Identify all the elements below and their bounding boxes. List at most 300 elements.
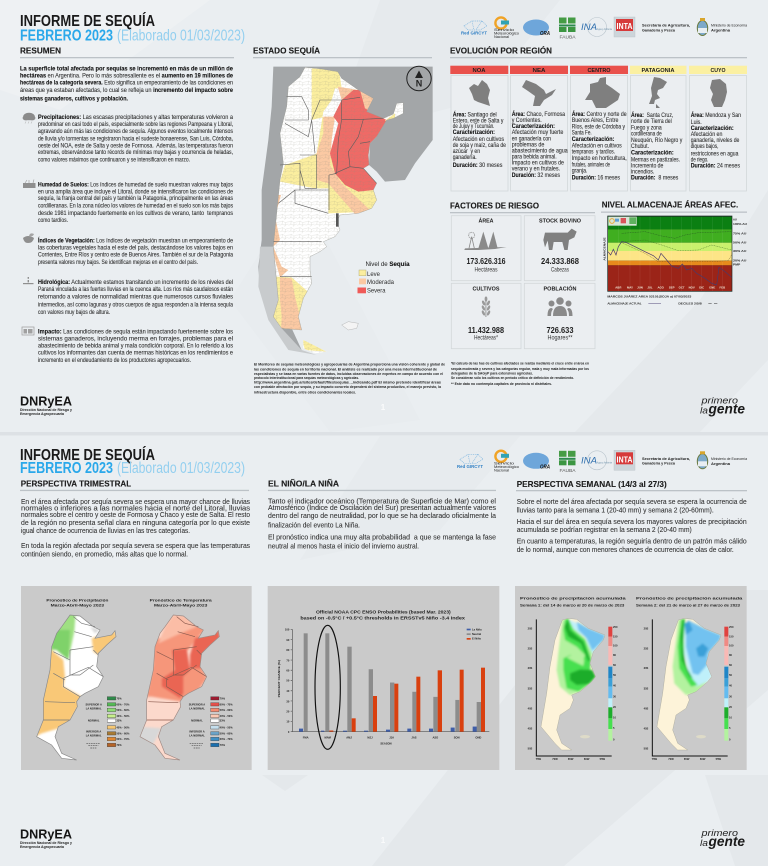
map titles: Pronóstico de Precipitación <box>46 598 108 602</box>
page 2 logos: Meteorológico <box>494 465 519 469</box>
text: CUYO: Afectación en <box>691 131 722 138</box>
text: CUYO: Duración: 24 meses <box>691 163 740 170</box>
text block: resumen intro: áreas que ya estaban afectadas, lo cual se refleja un incremento del impacto sobre <box>20 87 233 94</box>
heading: resumen: RESUMEN <box>20 47 61 56</box>
panel: area: 173.626.316 <box>466 256 506 266</box>
page number 2: 1 <box>381 836 386 845</box>
map axes and colour bars: 70W <box>668 757 674 761</box>
logo: primero la gente page 2: la <box>700 838 708 849</box>
axes: 90 <box>286 638 290 642</box>
text: CUYO <box>691 112 741 170</box>
legend: precipitation <box>85 696 130 748</box>
map axes and colour bars: 50 <box>729 673 732 677</box>
chart title: Official NOAA CPC ENSO Probabilities (based Mar. 2023) <box>316 609 451 614</box>
map axes and colour bars: 20S <box>644 627 649 631</box>
icon: PATAGONIA map <box>649 77 667 108</box>
text: NEA: en ganadería con <box>512 136 551 142</box>
text block: resumen intro: La superficie total afectada por sequías se incrementó en más de un millón de <box>20 65 233 72</box>
text: NOA: Estero, este de Salta y <box>453 118 504 124</box>
page number 1: 1 <box>381 403 386 412</box>
text: PATAGONIA: Fuego y zona <box>631 124 662 131</box>
legend: precipitation: 50% - 60% <box>116 708 130 712</box>
text: NEA: Impacto en cultivos de <box>512 160 565 166</box>
axes <box>277 628 489 746</box>
text block: resumen intro: sistemas ganaderos, cultivos y población. <box>20 96 128 102</box>
footnote: monitoreo <box>254 362 446 395</box>
axes: 0 <box>288 730 290 734</box>
panel: area: Hectáreas <box>474 266 498 274</box>
map axes and colour bars: 150 <box>613 634 618 638</box>
text: CENTRO: Impacto en horticultura, <box>572 155 627 162</box>
text: CENTRO: tempranos y tardíos. <box>572 149 615 156</box>
heading: perspectiva trimestral: PERSPECTIVA TRIMESTRAL <box>21 479 131 488</box>
chart: nivel de almacenaje: AU <box>733 218 737 222</box>
chart: nivel de almacenaje: DIC <box>699 286 704 290</box>
chart: nivel de almacenaje: ALMACENAJE <box>603 237 607 261</box>
page 1 logos: Red GIRCYT <box>461 30 487 36</box>
icon: CUYO map <box>710 79 727 107</box>
page 1 logos <box>461 17 747 40</box>
map axes and colour bars: 25S <box>528 647 533 651</box>
map axes and colour bars <box>528 619 734 761</box>
text block: hidrologica: con valores muy bajos de altura. <box>38 309 110 316</box>
logo: primero la gente page 2: primero <box>700 828 738 839</box>
axes: AMJ <box>346 735 352 739</box>
chart: nivel de almacenaje: MARCOS JUÁREZ AREA 52101(SOJA a) 07/03/2023 <box>607 294 692 299</box>
page 2 title: FEBRERO 2023 <box>20 460 113 477</box>
legend: temperature: SUPERIOR A <box>189 702 205 706</box>
chart: nivel de almacenaje: 20% AU <box>733 259 746 263</box>
map axes and colour bars: 80 <box>613 653 616 657</box>
legend: temperature: NORMAL <box>191 718 203 722</box>
footnote: monitoreo: El Monitoreo de sequías meteorológicas y agropecuarias de Argentina proporciona una visión coherente y global de <box>254 362 446 366</box>
text: PATAGONIA: Área: Santa Cruz, <box>631 112 674 119</box>
chart: nivel de almacenaje: 100% AU <box>733 222 747 226</box>
axes: JJA <box>389 735 394 739</box>
chart: nivel de almacenaje: OCT <box>679 286 685 290</box>
panel: CUYO <box>689 66 747 191</box>
text block: indices de vegetacion: Corrientes, Entre Ríos y centro este de Buenos Aires. También el sur de la Patagonia <box>38 252 233 259</box>
icon: cow <box>543 229 577 250</box>
text block: perspectiva semanal: Sobre el norte del área afectada por sequía severa se espera la ocurrencia de <box>517 497 747 506</box>
logo: DNRyEA page 2: Emergencia Agropecuaria <box>20 845 65 849</box>
text block: humedad de suelos: Humedad de Suelos: Los índices de humedad de suelo muestran valores muy bajos <box>38 182 233 188</box>
panel: pronostico semanal maps <box>515 586 747 770</box>
map axes and colour bars: 30 <box>729 694 732 698</box>
map axes and colour bars: 100 <box>729 644 734 648</box>
axes: 70 <box>286 658 290 662</box>
text: PATAGONIA <box>631 112 683 182</box>
page 1 logos: INA <box>581 22 597 32</box>
icon: windmill and trees <box>464 232 507 250</box>
legend: precipitation: 70% <box>116 743 122 747</box>
text block: el nino la nina <box>268 496 497 551</box>
page 1 logos: ORA <box>540 31 550 37</box>
text: CUYO: restricciones en agua <box>691 150 739 157</box>
map titles: Pronóstico de Temperatura <box>150 598 212 602</box>
chart: nivel de almacenaje: ABR <box>615 286 621 290</box>
text: NEA: Área: Chaco, Formosa <box>512 111 566 118</box>
heading: perspectiva semanal: PERSPECTIVA SEMANAL (14/3 al 27/3) <box>517 480 667 489</box>
text: CENTRO: Buenos Aires, Entre <box>572 117 619 124</box>
panel: poblacion: 726.633 <box>546 325 574 335</box>
heading: evolucion por region: EVOLUCIÓN POR REGIÓN <box>450 45 552 56</box>
legend: temperature: 50% - 60% <box>220 708 233 712</box>
panel: cultivos: 11.432.988 <box>468 325 504 335</box>
map axes and colour bars: 10 <box>613 716 616 720</box>
page 2 logos: Secretaría de Agricultura, <box>642 456 690 461</box>
legend: temperature: 70% <box>220 696 226 700</box>
text block: precipitaciones: oeste del NOA, este de Salta y oeste de Formosa. Además, las temperaturas fueron <box>38 142 233 150</box>
footnote: monitoreo: infraestructura disponible, entre otros condicionantes locales. <box>254 390 356 395</box>
text: PATAGONIA: Mermas en pastizales. <box>631 157 680 164</box>
axes: SEASON <box>380 742 392 746</box>
panel: area: ÁREA <box>478 218 494 225</box>
legend: precipitation: 60% - 70% <box>116 737 130 741</box>
text: CENTRO: Duración: 16 meses <box>572 175 620 182</box>
chart: nivel de almacenaje: 50% AU <box>733 240 746 244</box>
chart: nivel de almacenaje: JUL <box>647 286 653 290</box>
legend: nivel de sequia: Severa <box>367 288 386 295</box>
chart: nivel de almacenaje: 75% AU <box>733 231 746 235</box>
panel: poblacion: Hogares** <box>548 334 573 342</box>
map: temperature outlook <box>140 614 220 760</box>
legend: temperature: 40% - 50% <box>220 725 233 729</box>
map axes and colour bars: 55W <box>600 757 606 761</box>
logo: primero la gente page 1 <box>700 396 745 416</box>
page 1 title <box>20 11 245 44</box>
footnote: factores: delegados de la SAGyP para extensivos agrícolas. <box>451 370 533 376</box>
panel: cultivos: Hectáreas* <box>474 334 498 342</box>
page 2 logos: INTA <box>616 455 633 464</box>
legend: precipitation: SUPERIOR A <box>85 702 102 706</box>
map axes and colour bars: 30 <box>613 694 616 698</box>
chart title: based on -0.5°C / +0.5°C thresholds in ERSSTv5 Niño -3.4 Index <box>300 615 466 620</box>
axes: MAM <box>324 735 332 739</box>
legend: temperature: 60% - 70% <box>220 702 233 706</box>
text: CUYO: Área: Mendoza y San <box>691 112 741 119</box>
footnote: factores <box>451 360 590 386</box>
page 1 logos: Servicio <box>494 28 514 32</box>
map: week 1 <box>540 618 606 750</box>
axes: 60 <box>286 669 290 673</box>
axes: JAS <box>411 735 417 739</box>
logo: DNRyEA page 1: Dirección Nacional de Riesgo y <box>20 408 72 412</box>
map axes and colour bars: 30S <box>644 666 649 670</box>
page 2 logos: Ganadería y Pesca <box>642 461 676 466</box>
chart legend <box>467 628 482 641</box>
text: NEA: y Corrientes. <box>512 117 542 124</box>
map axes and colour bars: 30S <box>528 666 533 670</box>
legend: precipitation: LA NORMAL <box>86 707 102 711</box>
map titles: Marzo-Abril-Mayo 2023 <box>51 604 104 608</box>
legend: precipitation: 50% - 60% <box>116 731 130 735</box>
text: NEA: verano y en frutales. <box>512 166 560 172</box>
axes: ASO <box>432 735 438 739</box>
map axes and colour bars: 55W <box>716 757 722 761</box>
text block: hidrologica: Paraná vinculada a las fuertes lluvias en la cuenca alta. Los ríos más caudalosos están <box>38 286 233 293</box>
text: NEA: Afectación muy fuerte <box>512 129 564 136</box>
text: CUYO: de riego. <box>691 156 709 163</box>
map axes and colour bars: 20 <box>729 705 732 709</box>
text block: impacto: cultivos los informantes dan cuenta de mermas históricas en los rendimientos e <box>38 350 233 357</box>
chart title <box>300 609 466 620</box>
legend: precipitation: INFERIOR A <box>86 730 101 734</box>
axes: 50 <box>286 679 290 683</box>
page 1 title: (Elaborado 01/03/2023) <box>117 27 245 44</box>
icon: vegetation <box>23 233 34 243</box>
legend: precipitation: LA NORMAL <box>86 734 102 738</box>
icon: NOA map <box>469 80 490 106</box>
panel: PATAGONIA: PATAGONIA <box>642 68 675 74</box>
axes: 20 <box>286 710 290 714</box>
panel: NEA <box>510 66 568 191</box>
text block: perspectiva trimestral: En el área afectada por sequía severa se espera una mayor chance de lluvias <box>21 497 250 506</box>
panel: stock bovino: 24.333.868 <box>541 256 579 266</box>
axes: 80 <box>286 648 290 652</box>
chart: nivel de almacenaje: FEB <box>719 286 725 290</box>
panel: cultivos <box>451 283 521 349</box>
text: CENTRO: granja. <box>572 167 588 174</box>
text: PATAGONIA: incendios. <box>631 169 655 176</box>
text: PATAGONIA: norte de Tierra del <box>631 118 672 125</box>
legend: precipitation: 33% <box>116 719 122 723</box>
text: NOA: azúcar y en <box>453 148 480 155</box>
text: CENTRO <box>572 111 627 182</box>
footnote: monitoreo: con probable afectación por sequía, y su impacto concreto dependerá del sistema productivo, el manejo previsto, la <box>254 384 442 389</box>
map titles: Pronóstico de precipitación acumulada <box>520 597 626 601</box>
text: NEA: para bebida animal. <box>512 154 557 160</box>
chart: nivel de almacenaje: PMP <box>733 262 741 266</box>
heading: estado sequia: ESTADO SEQUÍA <box>253 46 320 56</box>
legend: nivel de sequia <box>358 261 410 295</box>
compass <box>407 66 431 91</box>
panel: stock bovino <box>524 216 595 281</box>
map axes and colour bars: 35S <box>528 687 533 691</box>
map axes and colour bars: 5 <box>729 726 731 730</box>
icon: impact <box>22 327 34 335</box>
map axes and colour bars: 40 <box>729 684 732 688</box>
map axes and colour bars: 250 <box>613 625 618 629</box>
text block: resumen intro: hectáreas de la categoría severa. Esto significa un empeoramiento de las condiciones en <box>20 80 233 87</box>
page 2 logos: ORA <box>540 464 550 470</box>
icon: cloud <box>23 113 35 124</box>
panel: cultivos: CULTIVOS <box>472 287 500 293</box>
text: NOA: de Jujuy y Tucumán. <box>453 123 495 130</box>
map axes and colour bars: 150 <box>729 634 734 638</box>
icon: people <box>548 297 572 316</box>
icon: water level <box>23 277 34 284</box>
heading: factores de riesgo: FACTORES DE RIESGO <box>450 202 540 211</box>
logo: DNRyEA page 1 <box>20 394 73 416</box>
panel: CENTRO: CENTRO <box>588 68 611 74</box>
page 1 logos: Ganadería y Pesca <box>642 27 676 32</box>
legend: temperature: 70% <box>220 743 226 747</box>
legend: precipitation: 40% - 50% <box>116 714 130 718</box>
page 2 title: (Elaborado 01/03/2023) <box>117 460 245 477</box>
text block: hidrologica: intermedios, así como lagunas y otros cuerpos de agua responden a la intensa sequía <box>38 301 233 308</box>
map titles: Semana 1: del 14 de marzo al 20 de marzo de 2023 <box>520 603 625 607</box>
axes: OND <box>475 735 481 739</box>
text: NOA: de soja y maíz, caña de <box>453 142 507 149</box>
logo: primero la gente page 1: gente <box>707 402 745 416</box>
map axes and colour bars: 40S <box>528 707 533 711</box>
map titles: Semana 2: del 21 de marzo al 27 de marzo de 2023 <box>636 603 740 607</box>
text: NEA: Caracterización: <box>512 123 555 130</box>
axes: FMA <box>303 735 309 739</box>
axes: 100 <box>285 628 290 632</box>
text: NOA: Caracterización: <box>453 129 495 136</box>
legend: temperature: 60% - 70% <box>220 737 233 741</box>
text: NEA: problemas de <box>512 142 545 148</box>
text block: perspectiva semanal: de lo normal, aunque con menores chances de ocurrencia de olas de calor. <box>517 545 734 554</box>
text: PATAGONIA: Duración: 8 meses <box>631 175 678 182</box>
map axes and colour bars: 0 <box>613 738 615 742</box>
legend: nivel de sequia: Nivel de Sequía <box>366 261 410 268</box>
panel: pronostico trimestral maps <box>21 586 252 770</box>
footnote: factores: Se consideran sólo los cultivos en período crítico de definición de rendimiento. <box>451 375 574 380</box>
text block: humedad de suelos <box>38 182 233 224</box>
axes: 10 <box>286 720 290 724</box>
page 1 logos: INTA <box>616 22 633 31</box>
map axes and colour bars: 45S <box>644 727 649 731</box>
heading: el nino la nina: EL NIÑO/LA NIÑA <box>268 478 339 488</box>
page 2 logos: Agua y Ambiente <box>597 460 612 464</box>
panel: ENSO chart <box>268 586 499 770</box>
text block: el nino la nina: Atmosférico (Índice de Oscilación del Sur) presentan actualmente valores <box>268 503 496 512</box>
text block: perspectiva semanal <box>517 497 747 554</box>
page 1 logos: Nacional <box>494 35 509 39</box>
chart: nivel de almacenaje: MAY <box>627 286 633 290</box>
panel: stock bovino: STOCK BOVINO <box>539 219 581 225</box>
chart: nivel de almacenaje: SEP <box>669 286 675 290</box>
text block: impacto: Impacto: Las condiciones de sequía están impactando fuertemente sobre los <box>38 328 233 335</box>
legend: temperature <box>189 696 233 748</box>
text block: indices de vegetacion: presenta valores muy bajos. Se identifican mejoras en el centro del país. <box>38 259 198 266</box>
text: NOA: Duración: 30 meses <box>453 162 502 169</box>
text block: perspectiva trimestral: normales sobre el centro y oeste de Formosa y Chaco y este de Salta. El resto <box>21 510 250 519</box>
page 1 logos: Meteorológico <box>494 32 519 36</box>
text: CENTRO: Caracterización: <box>572 136 614 143</box>
axes: 30 <box>286 699 290 703</box>
heading: nivel almacenaje: NIVEL ALMACENAJE ÁREAS AFEC. <box>602 200 738 210</box>
logo: DNRyEA page 2: Dirección Nacional de Riesgo y <box>20 841 72 845</box>
text: CENTRO: Ríos, este de Córdoba y <box>572 124 626 131</box>
map: week 2 <box>656 618 722 750</box>
panel: PATAGONIA <box>630 66 686 191</box>
text block: resumen intro <box>20 65 233 102</box>
map axes and colour bars: 20 <box>613 705 616 709</box>
text block: precipitaciones: extremas, observándose tanto récords de mínimas muy bajas y ocurrencia de heladas, <box>38 149 233 156</box>
map axes and colour bars: 65W <box>684 757 690 761</box>
text block: perspectiva semanal: lluvias tanto para la semana 1 (20-40 mm) y semana 2 (20-60mm). <box>517 506 714 514</box>
text block: el nino la nina: neutral al menos hasta el inicio del invierno austral. <box>268 542 419 551</box>
legend: temperature: LA NORMAL <box>189 707 205 711</box>
text block: precipitaciones: Precipitaciones: Las escasas precipitaciones y altas temperaturas volvieron a <box>38 114 233 121</box>
bars <box>299 633 485 732</box>
map axes and colour bars: 75W <box>652 757 658 761</box>
text: PATAGONIA: Neuquén, Río Negro y <box>631 137 683 144</box>
text block: hidrologica <box>38 279 233 316</box>
map axes and colour bars: 60 <box>613 663 616 667</box>
text block: humedad de suelos: en una amplia área que incluye el Litoral, donde se intensificaron las condiciones de <box>38 188 233 196</box>
text: NEA: abastecimiento de agua <box>512 148 568 154</box>
footnote: monitoreo: http://www.argentina.gob.ar/sites/default/files/sequias_..indicando.pdf El mismo pretende identificar áreas <box>254 380 441 385</box>
panel: poblacion <box>524 283 595 349</box>
map axes and colour bars: 60 <box>729 663 732 667</box>
legend: nivel de sequia: Leve <box>367 271 380 278</box>
axes: PERCENT CHANCE (%) <box>277 660 281 697</box>
icon: wheat <box>481 296 491 317</box>
text block: perspectiva trimestral: de la región no presenta señal clara en ninguna categoría por lo que existe <box>21 518 250 527</box>
text block: impacto <box>38 328 233 364</box>
panel: CENTRO <box>570 66 628 191</box>
page 1 logos: Secretaría de Agricultura, <box>642 23 690 28</box>
text block: precipitaciones: agravando aún más las condiciones de sequía. Algunos eventos localmente intensos <box>38 128 233 135</box>
page 2 logos: Argentina <box>711 461 731 466</box>
logo: primero la gente page 2: gente <box>707 834 745 849</box>
map: estado sequia <box>258 63 433 357</box>
map axes and colour bars: 70W <box>552 757 558 761</box>
text block: impacto: incremento en el endeudamiento de los productores agropecuarios. <box>38 357 191 364</box>
logo: DNRyEA page 1: DNRyEA <box>20 394 73 408</box>
text: NOA: Afectación en cultivos <box>453 136 504 143</box>
legend: temperature: 33% <box>220 719 226 723</box>
panel: poblacion: POBLACIÓN <box>544 285 576 293</box>
map axes and colour bars: 65W <box>568 757 574 761</box>
text block: precipitaciones: de lluvia y/o tormentas se registraron hacia el sudeste bonaerense, San Luis, Córdoba, <box>38 136 233 142</box>
text block: precipitaciones <box>38 114 233 164</box>
legend: precipitation: 60% - 70% <box>116 702 130 706</box>
text: NOA: Área: Santiago del <box>453 112 497 118</box>
legend: temperature: 50% - 60% <box>220 731 233 735</box>
legend: temperature: INFERIOR A <box>189 730 205 734</box>
map axes and colour bars: 10 <box>729 716 732 720</box>
text: PATAGONIA: Caracterización: <box>631 149 674 156</box>
page 2 logos: Nacional <box>494 468 509 472</box>
icon: NEA map <box>522 80 556 106</box>
legend: precipitation: 70% <box>116 696 122 700</box>
text block: perspectiva trimestral: continúen siendo, en promedio, más altas que lo normal. <box>21 549 188 558</box>
panel: CUYO: CUYO <box>710 68 726 74</box>
text block: resumen intro: hectáreas en Argentina. Pero lo más sobresaliente es el aumento en 19 millones de <box>20 72 233 79</box>
chart: nivel de almacenaje <box>603 216 747 306</box>
text block: impacto: sistemas ganaderos, incluyendo merma en forrajes, problemas para el <box>38 335 233 342</box>
page 1 logos: Agua y Ambiente <box>597 27 612 31</box>
map titles: Marzo-Abril-Mayo 2023 <box>154 604 208 608</box>
text block: perspectiva semanal: acumulada se podrían registrar en la semana 2 (20-40 mm) <box>517 525 692 534</box>
text block: hidrologica: retornando a valores de normalidad mientras que numerosos cursos fluviales <box>38 294 233 301</box>
chart legend: Neutral <box>472 632 481 636</box>
chart legend: El Niño <box>472 637 482 641</box>
chart legend: La Niña <box>472 628 482 632</box>
page 1 logos: Ministerio de Economía <box>711 24 747 28</box>
page 2 logos <box>457 450 747 473</box>
text block: perspectiva trimestral <box>21 497 250 558</box>
map axes and colour bars: 50S <box>528 747 533 751</box>
small logos on chart <box>608 217 637 226</box>
map axes and colour bars: 40S <box>644 707 649 711</box>
map axes and colour bars: 250 <box>729 625 734 629</box>
logo: primero la gente page 2 <box>700 828 745 849</box>
panel: NEA: NEA <box>532 68 546 74</box>
chart: nivel de almacenaje: DECILES 2/5/8 <box>678 302 702 306</box>
footnote: monitoreo: las condiciones de sequía en territorio nacional. El análisis es realizado por una mesa interinstitucional de <box>254 366 438 372</box>
chart: nivel de almacenaje: ENE <box>709 286 715 290</box>
map axes and colour bars: 20S <box>528 627 533 631</box>
text: PATAGONIA: Incremento de <box>631 163 664 170</box>
map axes and colour bars: 60W <box>700 757 706 761</box>
